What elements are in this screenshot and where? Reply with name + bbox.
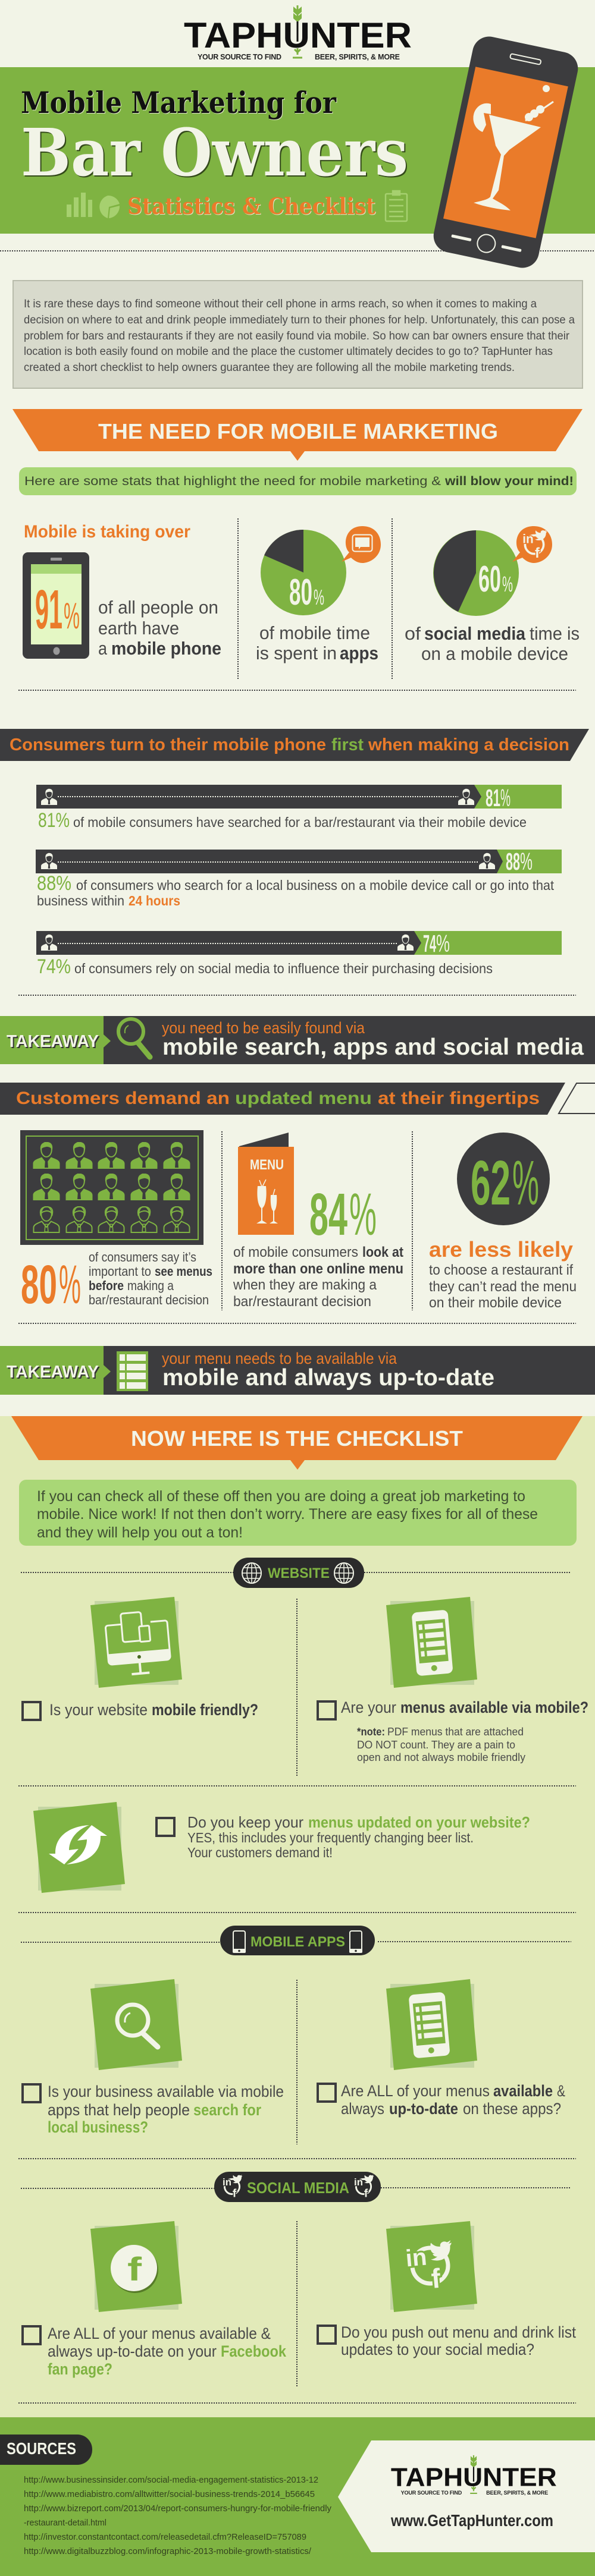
takeaway: mobile search: you need to be easily found via <box>162 1019 365 1037</box>
chart: bar 74% <box>36 930 562 957</box>
chart: bar 74%: 74 <box>423 930 436 957</box>
icon: clipboard <box>386 191 407 221</box>
logo: TapHunter header <box>184 5 412 61</box>
banner: now here is the checklist: NOW HERE IS THE CHECKLIST <box>131 1426 463 1451</box>
text: facebook check: Facebook <box>221 2342 287 2360</box>
banner: customers demand updated menu: at their fingertips <box>378 1089 540 1108</box>
chart: bar 88%: % <box>520 848 533 875</box>
chart: pie 80% apps: is spent in <box>256 643 337 663</box>
chart: pie 60% social media: time is <box>530 623 580 644</box>
chart: pie 60% social media: % <box>502 572 513 596</box>
text: 88% stat: business within <box>37 893 124 908</box>
text: 84% online menu: look at <box>362 1244 403 1260</box>
stat: mobile is taking over 91% <box>23 522 221 659</box>
text: 84% online menu: more than one online menu <box>233 1261 403 1277</box>
tile: devices icon <box>90 1597 182 1688</box>
tile: refresh arrows icon <box>33 1802 125 1893</box>
icon: speech bubble social: f <box>535 545 540 561</box>
text: facebook check <box>23 2325 287 2378</box>
banner: customers demand updated menu: Customers demand an <box>16 1089 230 1108</box>
tile: social icon: f <box>430 2263 442 2294</box>
heading: sources: SOURCES <box>7 2439 76 2458</box>
text: menus updated check: Do you keep your <box>187 1813 303 1831</box>
text: are less likely <box>429 1237 577 1311</box>
callout: stats intro: will blow your mind! <box>444 474 574 488</box>
text: menus via mobile check: Are your <box>341 1699 396 1716</box>
text: social updates check <box>318 2323 576 2358</box>
text: app menus check <box>318 2082 565 2118</box>
callout: checklist intro: If you can check all of these off then you are doing a great job marketing to <box>37 1488 525 1505</box>
pill: mobile apps: MOBILE APPS <box>250 1934 345 1950</box>
text: facebook check: fan page? <box>48 2360 112 2378</box>
text: 88% stat <box>37 872 555 908</box>
decorative dotted divider: header <box>0 250 595 251</box>
takeaway: mobile search <box>0 1016 595 1064</box>
title block: Bar Owners <box>21 114 408 191</box>
banner: consumers turn to mobile: Consumers turn to their mobile phone <box>10 735 326 754</box>
stat: mobile is taking over 91%: 91 <box>35 578 62 640</box>
takeaway: mobile search: TAKEAWAY <box>7 1032 99 1051</box>
logo: TapHunter header: TAPHUNTER <box>184 15 412 55</box>
heading: sources <box>0 2435 92 2465</box>
takeaway: always up to date: TAKEAWAY <box>7 1363 99 1382</box>
text: app menus check: on these apps? <box>463 2100 561 2118</box>
stat: 62% circle: 62 <box>471 1148 511 1218</box>
stat: mobile is taking over 91%: Mobile is taking over <box>24 522 190 542</box>
text: source links: http://www.digitalbuzzblog.com/infographic-2013-mobile-growth-statistics/ <box>24 2546 312 2556</box>
text: menus updated check: Your customers demand it! <box>187 1845 333 1860</box>
text: 88% stat: 88% <box>37 872 71 895</box>
banner: now here is the checklist <box>11 1416 583 1470</box>
stat: mobile is taking over 91%: a <box>98 638 108 659</box>
pill: mobile apps <box>220 1926 375 1955</box>
callout: stats intro <box>19 467 577 495</box>
panel: intro text <box>13 281 583 388</box>
chart: pie 80% apps: 80 <box>289 572 312 613</box>
callout: checklist intro: and they will help you out a ton! <box>37 1524 243 1541</box>
text: are less likely: to choose a restaurant if <box>429 1262 573 1278</box>
pill: website <box>233 1558 364 1588</box>
panel: intro text: problem for bars and restaurants if they are not easily found via mobile. So how can bar owners ensure that their <box>24 330 570 342</box>
text: facebook check: Are ALL of your menus available & <box>48 2325 271 2342</box>
text: 80% see menus: see menus <box>155 1264 212 1279</box>
text: source links: http://www.bizreport.com/2013/04/report-consumers-hungry-for-mobile-friendly <box>24 2503 331 2514</box>
text: 80% see menus: important to <box>89 1264 151 1279</box>
decorative dotted divider <box>18 995 576 996</box>
text: 74% stat: of consumers rely on social media to influence their purchasing decisions <box>74 961 493 976</box>
panel: footer logo: YOUR SOURCE TO FIND <box>401 2490 462 2496</box>
panel: footer logo: TAPHUNTER <box>391 2463 557 2492</box>
chart: pie 80% apps <box>256 530 378 663</box>
icon: bar chart and pie <box>67 193 120 218</box>
tile: social icon: in <box>405 2244 428 2272</box>
stat: 62% circle <box>457 1133 550 1225</box>
title block: Mobile Marketing for <box>21 85 337 120</box>
text: 88% stat: 24 hours <box>129 893 180 908</box>
text: business apps check <box>23 2083 284 2136</box>
takeaway: always up to date: mobile and always up-to-date <box>162 1365 494 1391</box>
text: facebook check: always up-to-date on your <box>48 2342 217 2360</box>
text: 80% see menus: % <box>59 1254 81 1315</box>
decorative dotted dividers: social media <box>18 2188 576 2403</box>
text: 80% see menus: of consumers say it’s <box>89 1250 196 1265</box>
chart: pie 80% apps: apps <box>340 643 378 663</box>
logo: TapHunter header: BEER, SPIRITS, & MORE <box>315 53 400 61</box>
text: 80% see menus: before <box>89 1278 124 1293</box>
text: 74% stat: 74% <box>37 955 71 978</box>
chart: bar 81% <box>36 784 562 812</box>
panel: footer logo <box>338 2440 595 2552</box>
chart: pie 60% social media: on a mobile device <box>421 643 568 664</box>
panel: intro text: created a short checklist to help owners guarantee they are following all the mobile marketing trends. <box>24 361 515 374</box>
panel: footer logo: www.GetTapHunter.com <box>390 2511 553 2530</box>
chart: pie 60% social media <box>405 530 580 664</box>
text: source links: http://www.businessinsider.com/social-media-engagement-statistics-2013-12 <box>24 2475 318 2485</box>
stat: mobile is taking over 91%: mobile phone <box>111 638 221 659</box>
text: app menus check: up-to-date <box>389 2100 458 2118</box>
pill: social media: f <box>364 2188 368 2200</box>
text: menus via mobile check <box>318 1699 588 1763</box>
callout: checklist intro: mobile. Nice work! If not then don’t worry. There are easy fixes for all of these <box>37 1506 538 1523</box>
text: 81% stat <box>38 809 527 832</box>
decorative dotted dividers: stats <box>18 518 576 690</box>
text: mobile friendly check <box>23 1701 258 1720</box>
text: source links: -restaurant-detail.html <box>24 2518 107 2528</box>
text: social updates check: Do you push out menu and drink list <box>341 2323 576 2341</box>
text: 74% stat <box>37 955 493 978</box>
icon: speech bubble social <box>512 526 552 563</box>
stat: 62% circle: % <box>512 1148 539 1218</box>
stat: mobile is taking over 91%: % <box>64 596 80 637</box>
text: menus via mobile check: PDF menus that are attached <box>387 1726 524 1738</box>
text: menus via mobile check: *note: <box>357 1726 385 1738</box>
banner: the need for mobile marketing <box>12 409 583 461</box>
decorative dotted dividers: menu <box>18 1131 576 1323</box>
text: 81% stat: 81% <box>38 809 70 832</box>
icon: menu with glasses <box>238 1133 294 1235</box>
text: 84% online menu <box>233 1181 403 1310</box>
text: source links: http://www.mediabistro.com/alltwitter/social-business-trends-2014_b56645 <box>24 2489 315 2499</box>
stat: mobile is taking over 91%: earth have <box>98 618 179 639</box>
text: business apps check: Is your business available via mobile <box>48 2083 284 2100</box>
text: 84% online menu: 84 <box>309 1181 347 1248</box>
title block: Statistics & Checklist <box>127 193 375 219</box>
text: source links <box>24 2475 331 2556</box>
takeaway: mobile search: mobile search, apps and social media <box>162 1034 584 1060</box>
checklist background <box>0 1416 595 2417</box>
chart: bar 88% <box>36 848 562 875</box>
text: app menus check: available <box>493 2082 553 2100</box>
takeaway: always up to date: your menu needs to be available via <box>162 1350 397 1367</box>
text: business apps check: search for <box>193 2101 261 2119</box>
chart: pie 80% apps: % <box>314 585 324 609</box>
decorative dotted dividers: mobile apps <box>18 1913 576 2159</box>
text: 80% see menus: bar/restaurant decision <box>89 1292 209 1307</box>
text: menus updated check <box>156 1813 530 1860</box>
chart: bar 81%: 81 <box>486 784 500 812</box>
tile: facebook icon <box>90 2221 182 2312</box>
callout: checklist intro <box>19 1480 577 1546</box>
icon: large tilted phone with martini <box>431 33 581 271</box>
chart: pie 60% social media: of <box>405 623 421 644</box>
chart: bar 81%: % <box>500 784 511 812</box>
pill: social media: in <box>223 2176 231 2188</box>
pill: social media: SOCIAL MEDIA <box>247 2179 349 2197</box>
pill: social media <box>214 2172 381 2202</box>
tile: facebook icon: f <box>127 2250 142 2288</box>
panel: intro text: location is both easily found on mobile and the place the customer ultimately decides to go to? TapHunter has <box>24 345 553 358</box>
text: 84% online menu: when they are making a <box>233 1277 377 1293</box>
text: are less likely: they can’t read the menu <box>429 1279 577 1295</box>
takeaway: always up to date <box>0 1346 595 1395</box>
text: menus via mobile check: DO NOT count. They are a pain to <box>357 1739 515 1751</box>
icon: speech bubble social: in <box>522 532 534 546</box>
text: 80% see menus: 80 <box>21 1254 57 1315</box>
text: 80% see menus <box>21 1250 212 1315</box>
banner: customers demand updated menu: updated menu <box>235 1089 372 1108</box>
text: business apps check: local business? <box>48 2118 148 2136</box>
chart: bar 74%: % <box>436 930 450 957</box>
stat: mobile is taking over 91%: of all people on <box>98 597 218 618</box>
banner: consumers turn to mobile <box>0 729 589 761</box>
icon: menu with glasses: MENU <box>250 1157 284 1173</box>
banner: consumers turn to mobile: first <box>331 735 364 754</box>
banner: consumers turn to mobile: when making a decision <box>368 735 569 754</box>
chart: pie 60% social media: social media <box>424 623 526 644</box>
tile: app menu phone icon <box>386 1979 477 2070</box>
text: 80% see menus: making a <box>127 1278 174 1293</box>
text: are less likely: are less likely <box>429 1237 573 1262</box>
pill: social media: f <box>233 2188 237 2200</box>
logo: TapHunter header: YOUR SOURCE TO FIND <box>198 53 281 61</box>
banner: customers demand updated menu <box>0 1083 595 1115</box>
text: are less likely: on their mobile device <box>429 1295 562 1311</box>
text: 84% online menu: % <box>349 1181 377 1248</box>
chart: pie 80% apps: of mobile time <box>259 622 370 643</box>
icon: speech bubble apps <box>342 526 381 563</box>
text: menus updated check: menus updated on your website? <box>308 1813 530 1831</box>
footer green band <box>0 2417 595 2576</box>
text: app menus check: & <box>557 2082 565 2100</box>
callout: stats intro: Here are some stats that highlight the need for mobile marketing & <box>24 474 441 488</box>
title block <box>21 85 408 219</box>
pill: website: WEBSITE <box>268 1565 330 1581</box>
panel: footer logo: BEER, SPIRITS, & MORE <box>486 2490 548 2496</box>
tile: magnifier icon <box>90 1979 182 2070</box>
pill: social media: in <box>354 2176 363 2188</box>
text: social updates check: updates to your social media? <box>341 2341 534 2358</box>
tile: menu phone icon <box>386 1597 477 1688</box>
chart: bar 88%: 88 <box>506 848 520 875</box>
text: 84% online menu: of mobile consumers <box>233 1244 358 1260</box>
text: business apps check: apps that help people <box>48 2101 190 2119</box>
text: app menus check: Are ALL of your menus <box>341 2082 490 2100</box>
text: 84% online menu: bar/restaurant decision <box>233 1294 371 1310</box>
header green band <box>0 67 595 234</box>
panel: people grid <box>20 1130 203 1245</box>
text: 81% stat: of mobile consumers have searched for a bar/restaurant via their mobile device <box>73 814 527 830</box>
chart: pie 60% social media: 60 <box>478 559 501 600</box>
tile: social icon <box>386 2221 477 2312</box>
text: mobile friendly check: mobile friendly? <box>152 1701 258 1719</box>
text: source links: http://investor.constantcontact.com/releasedetail.cfm?ReleaseID=757089 <box>24 2532 306 2542</box>
decorative dotted dividers: website <box>18 1572 576 1786</box>
text: app menus check: always <box>341 2100 384 2118</box>
text: mobile friendly check: Is your website <box>49 1701 148 1719</box>
text: menus via mobile check: open and not always mobile friendly <box>357 1751 525 1763</box>
text: menus updated check: YES, this includes your frequently changing beer list. <box>187 1830 474 1845</box>
panel: intro text: It is rare these days to find someone without their cell phone in arms reach, so when it comes to making a <box>24 298 537 310</box>
text: 88% stat: of consumers who search for a local business on a mobile device call or go into that <box>76 877 555 893</box>
banner: the need for mobile marketing: THE NEED FOR MOBILE MARKETING <box>98 419 498 444</box>
panel: intro text: decision on where to eat and drink people immediately turn to their phones for help. Unfortunately, this can pose a <box>24 314 575 326</box>
